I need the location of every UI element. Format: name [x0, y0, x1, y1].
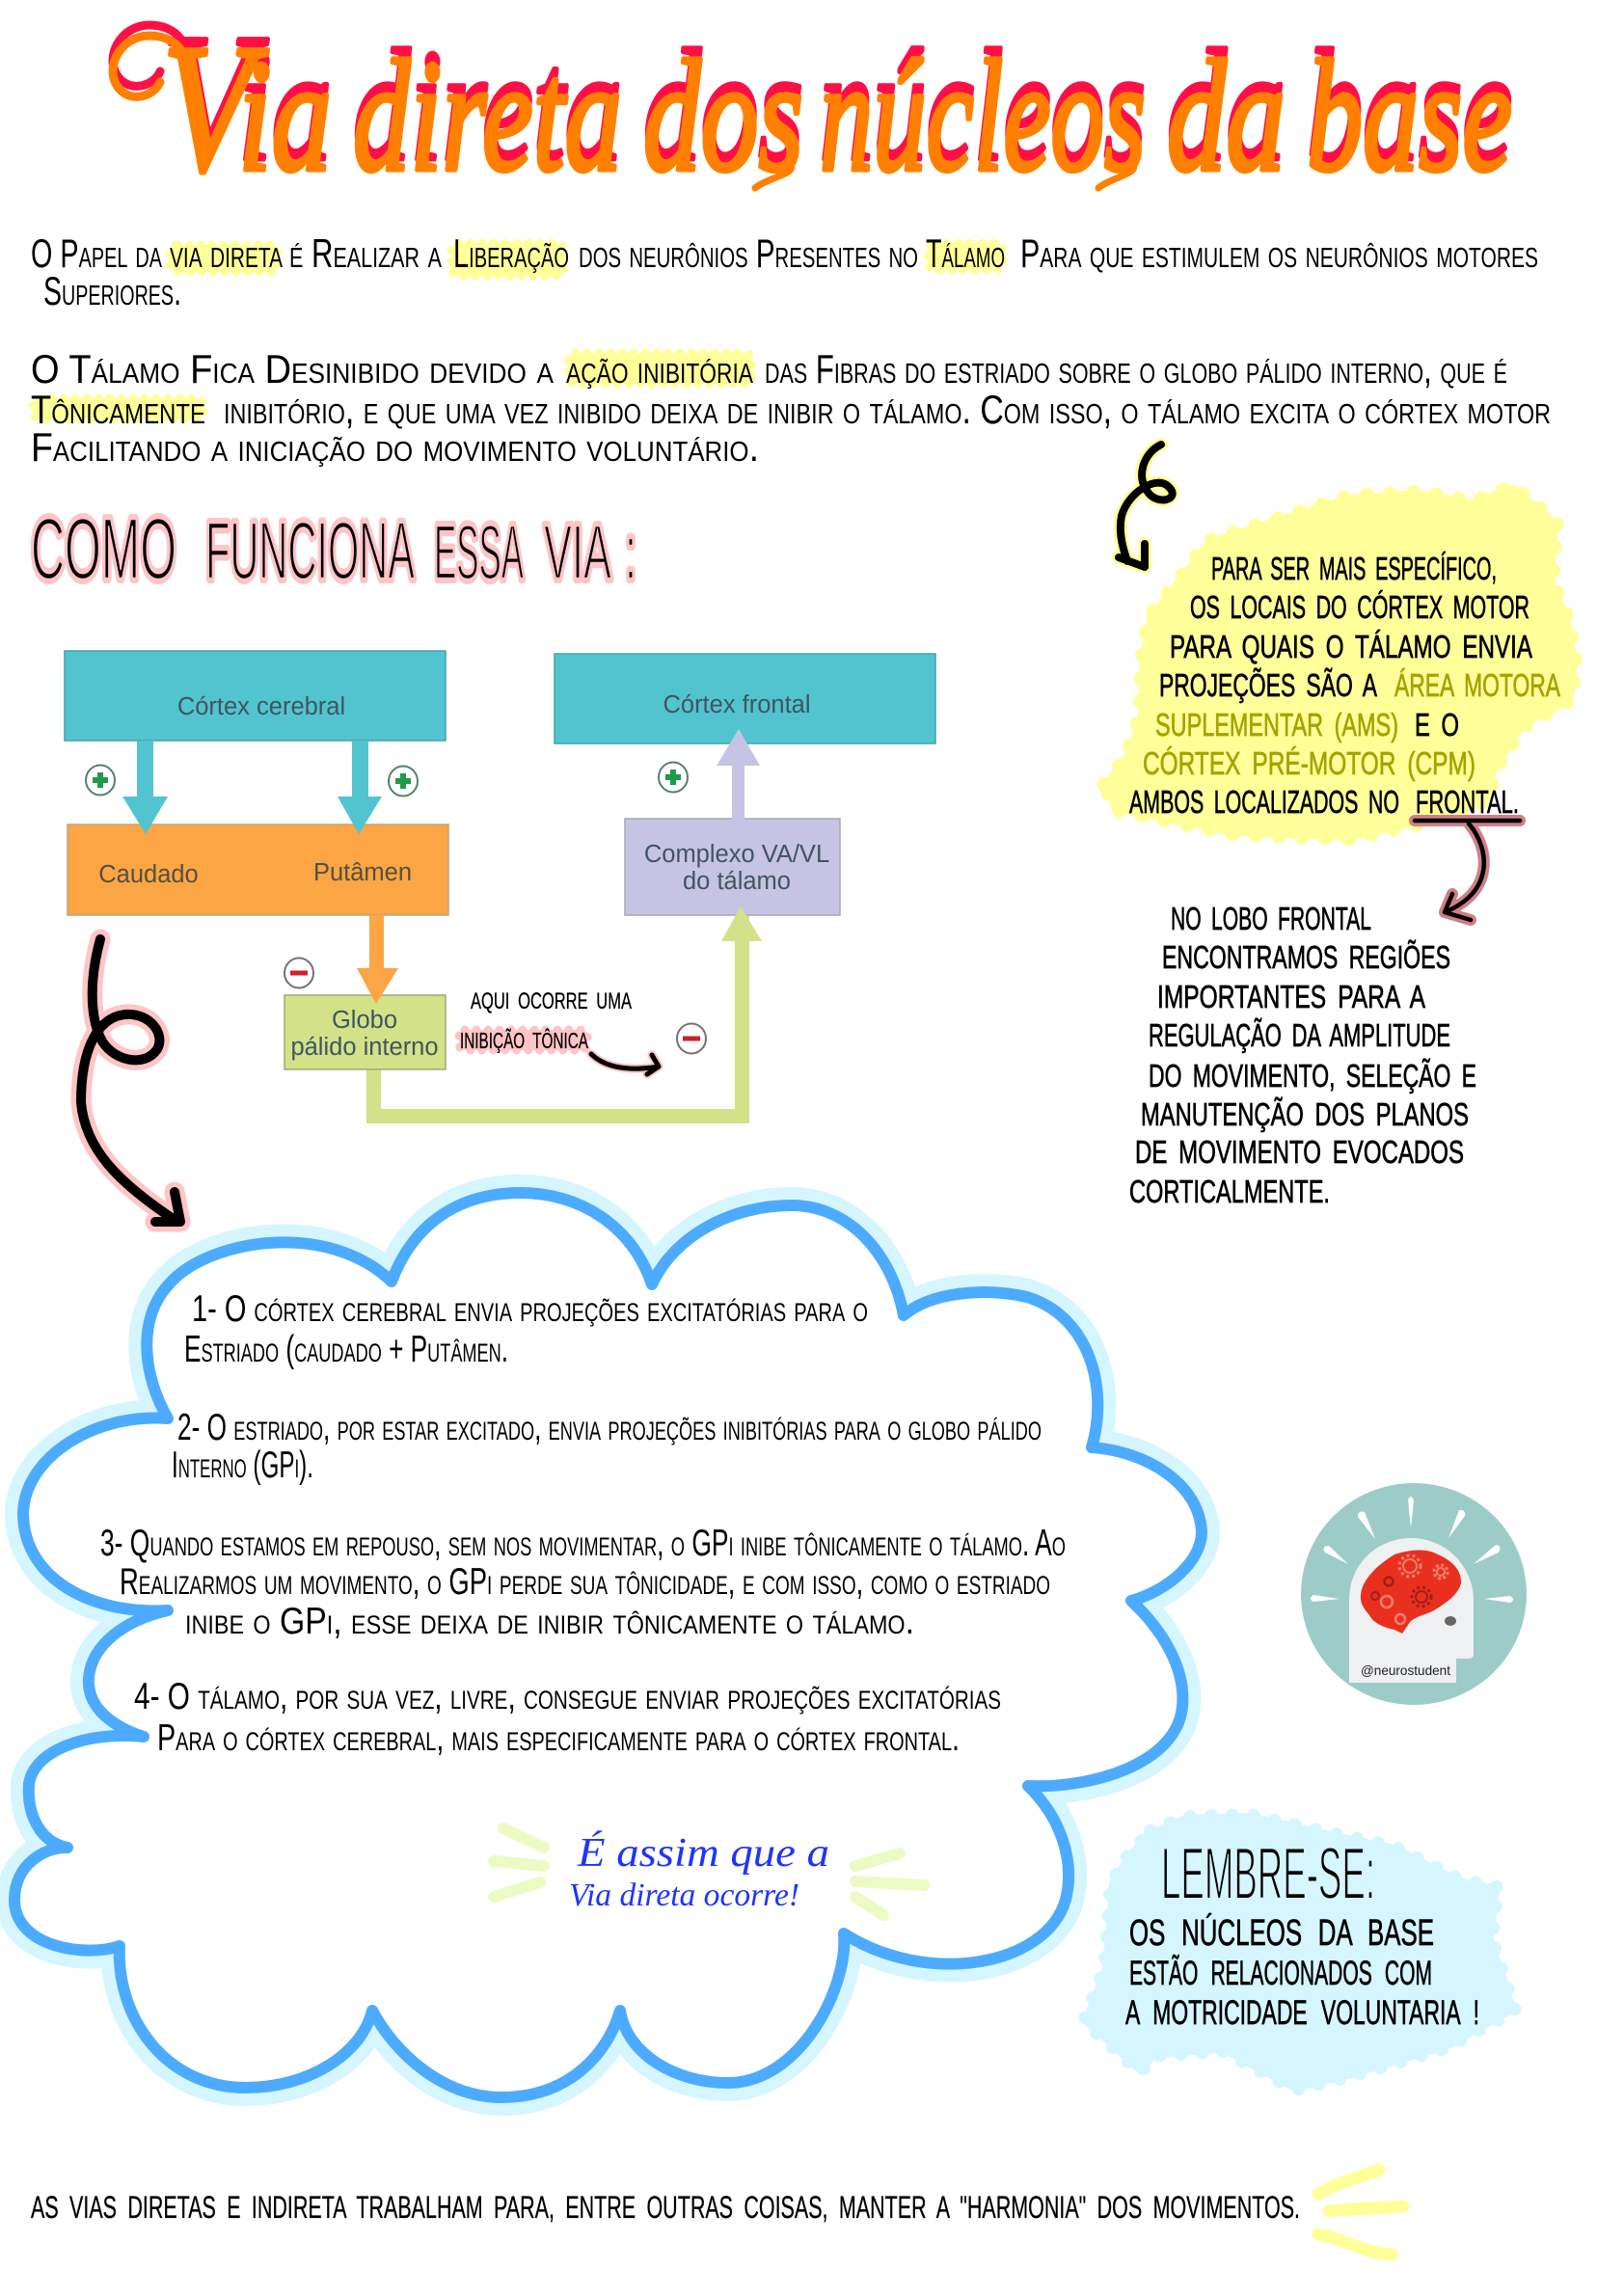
note: inibição tônica	[459, 988, 659, 1074]
title: base	[1307, 16, 1512, 194]
box: globo pálido interno	[284, 995, 446, 1069]
arrow: frontal underline to text below	[1415, 821, 1520, 920]
text: no lobo frontal: DO MOVIMENTO, SELEÇÃO E	[1149, 1058, 1476, 1094]
paragraph: tálamo desinibido: Facilitando a iniciação do movimento voluntário.	[31, 424, 759, 470]
title: ia	[238, 16, 332, 194]
panel: lembre-se: LEMBRE-SE:	[1161, 1833, 1375, 1915]
paragraph: papel da via direta: Liberação	[453, 230, 569, 276]
heading: como funciona essa via: VIA	[544, 509, 611, 595]
title	[113, 0, 1512, 210]
step 3: Realizarmos um movimento, o GPi perde sua tônicidade, e com isso, como o estriado	[120, 1561, 1050, 1603]
text: no lobo frontal	[1129, 901, 1476, 1209]
step 3: inibe o GPi, esse deixa de inibir tônicamente o tálamo.	[185, 1601, 914, 1642]
title: V	[162, 0, 269, 200]
heading: como funciona essa via: FUNCIONA	[205, 505, 415, 596]
panel: yellow highlight note: AMBOS LOCALIZADOS NO	[1129, 784, 1399, 820]
title: ia	[238, 27, 332, 204]
step 3: 3- Quando estamos em repouso, sem nos movimentar, o GPi inibe tônicamente o tálamo. Ao	[100, 1523, 1066, 1564]
title: da	[1167, 16, 1286, 194]
paragraph: papel da via direta: Tálamo	[926, 230, 1005, 276]
box: córtex frontal	[555, 654, 935, 743]
text: no lobo frontal: ENCONTRAMOS REGIÕES	[1162, 939, 1450, 975]
box: caudado e putâmen: Caudado	[98, 861, 199, 888]
box: complexo VA/VL: Complexo VA/VL	[644, 841, 829, 868]
panel: yellow highlight note: E O	[1415, 707, 1459, 743]
icon: plus	[659, 762, 688, 793]
step 1: Estriado (caudado + Putâmen.	[184, 1329, 508, 1370]
box: globo pálido interno: Globo	[332, 1007, 397, 1034]
note: é assim que a via direta ocorre	[494, 1828, 924, 1915]
text: no lobo frontal: REGULAÇÃO DA AMPLITUDE	[1149, 1017, 1450, 1053]
arrow: cortex to caudado	[122, 741, 168, 834]
heading: como funciona essa via: :	[625, 509, 636, 595]
step 2: 2- O estriado, por estar excitado, envia projeções inibitórias para o globo pálido	[177, 1407, 1042, 1448]
icon: plus	[389, 766, 418, 797]
note: é assim que a via direta ocorre: É assim que a	[577, 1830, 829, 1876]
text: núcleos da base: ESTÃO RELACIONADOS COM	[1129, 1955, 1432, 1992]
note: inibição tônica: INIBIÇÃO TÔNICA	[460, 1027, 588, 1053]
paragraph: papel da via direta: dos neurônios Presentes no	[579, 230, 918, 276]
text: núcleos da base	[1125, 1912, 1479, 2032]
title: dos	[643, 16, 803, 194]
text: no lobo frontal: DE MOVIMENTO EVOCADOS	[1135, 1134, 1464, 1170]
icon: neurostudent logo: @neurostudent	[1361, 1662, 1450, 1678]
arrow: yellow looped arrow	[1119, 445, 1173, 567]
paragraph: papel da via direta: é Realizar a	[289, 230, 442, 276]
title: dos	[643, 27, 803, 204]
paragraph: tálamo desinibido: ação inibitória	[566, 346, 754, 392]
box: complexo VA/VL	[625, 819, 840, 915]
step 4	[134, 1676, 1001, 1759]
icon: yellow rays	[1318, 2170, 1403, 2255]
box: córtex cerebral: Córtex cerebral	[177, 693, 345, 720]
box: córtex frontal: Córtex frontal	[663, 691, 811, 718]
paragraph: papel da via direta: Superiores.	[43, 268, 181, 313]
paragraph: papel da via direta: via direta	[170, 230, 283, 276]
panel: yellow highlight note: PROJEÇÕES SÃO A	[1159, 667, 1377, 703]
text: no lobo frontal: CORTICALMENTE.	[1129, 1174, 1330, 1209]
paragraph: tálamo desinibido: Tônicamente	[31, 387, 205, 432]
paragraph: tálamo desinibido: O Tálamo Fica Desinibido devido a	[31, 346, 555, 392]
title: base	[1307, 27, 1512, 204]
text: no lobo frontal: MANUTENÇÃO DOS PLANOS	[1141, 1096, 1469, 1132]
title: núcleos	[820, 27, 1146, 204]
box: globo pálido interno: pálido interno	[290, 1034, 439, 1061]
arrow: green arrowhead	[721, 906, 762, 955]
title: da	[1167, 27, 1286, 204]
text: no lobo frontal: NO LOBO FRONTAL	[1171, 901, 1371, 936]
step 2	[172, 1407, 1042, 1486]
arrow: complexo to frontal	[717, 729, 760, 820]
heading: como funciona essa via: COMO	[31, 501, 176, 598]
icon: minus	[284, 959, 313, 987]
panel: yellow highlight note: SUPLEMENTAR (AMS)	[1155, 707, 1398, 743]
panel: yellow highlight note: FRONTAL.	[1416, 784, 1519, 820]
title: núcleos	[820, 16, 1146, 194]
panel: yellow highlight note	[1104, 486, 1576, 839]
box: caudado e putâmen	[68, 824, 448, 915]
heading: como funciona essa via: ESSA	[434, 509, 524, 595]
flow diagram	[65, 651, 935, 1123]
icon: minus	[677, 1024, 706, 1053]
box: córtex cerebral	[65, 651, 446, 741]
paragraph: papel da via direta: O Papel da	[31, 230, 162, 276]
icon: neurostudent logo	[1301, 1483, 1527, 1705]
arrow: cortex to putamen	[338, 741, 382, 834]
step 4: Para o córtex cerebral, mais especificamente para o córtex frontal.	[157, 1717, 960, 1759]
heading: como funciona essa via: FUNCIONA	[205, 505, 415, 596]
title: direta	[353, 27, 622, 204]
panel: yellow highlight note: CÓRTEX PRÉ-MOTOR (CPM)	[1143, 745, 1475, 781]
step 1	[184, 1288, 868, 1370]
title: direta	[353, 16, 622, 194]
step 3	[100, 1523, 1066, 1642]
box: complexo VA/VL: do tálamo	[683, 868, 791, 895]
text: núcleos da base: OS NÚCLEOS DA BASE	[1129, 1912, 1434, 1954]
icon: plus	[86, 766, 115, 795]
heading: como funciona essa via: ESSA	[434, 509, 524, 595]
title: V	[162, 8, 269, 210]
note: inibição tônica: AQUI OCORRE UMA	[471, 988, 632, 1014]
arrow: big looped black arrow	[81, 939, 180, 1222]
panel: cloud with steps	[14, 1193, 1202, 2097]
paragraph: tálamo desinibido	[31, 346, 1551, 470]
step 1: 1- O córtex cerebral envia projeções excitatórias para o	[192, 1288, 868, 1330]
step 2: Interno (GPi).	[172, 1445, 313, 1486]
heading: como funciona essa via	[31, 501, 636, 598]
panel: lembre-se	[1084, 1815, 1515, 2090]
arrow: putamen to globo	[357, 915, 398, 1004]
text: no lobo frontal: IMPORTANTES PARA A	[1157, 979, 1425, 1014]
heading: como funciona essa via: VIA	[544, 509, 611, 595]
heading: como funciona essa via: COMO	[31, 501, 176, 598]
note: é assim que a via direta ocorre: Via direta ocorre!	[569, 1877, 799, 1913]
box: caudado e putâmen: Putâmen	[313, 859, 412, 886]
heading: como funciona essa via: :	[625, 509, 636, 595]
step 4: 4- O tálamo, por sua vez, livre, consegue enviar projeções excitatórias	[134, 1676, 1001, 1717]
paragraph: papel da via direta	[31, 230, 1538, 313]
arrow: green path to complexo	[366, 916, 749, 1123]
